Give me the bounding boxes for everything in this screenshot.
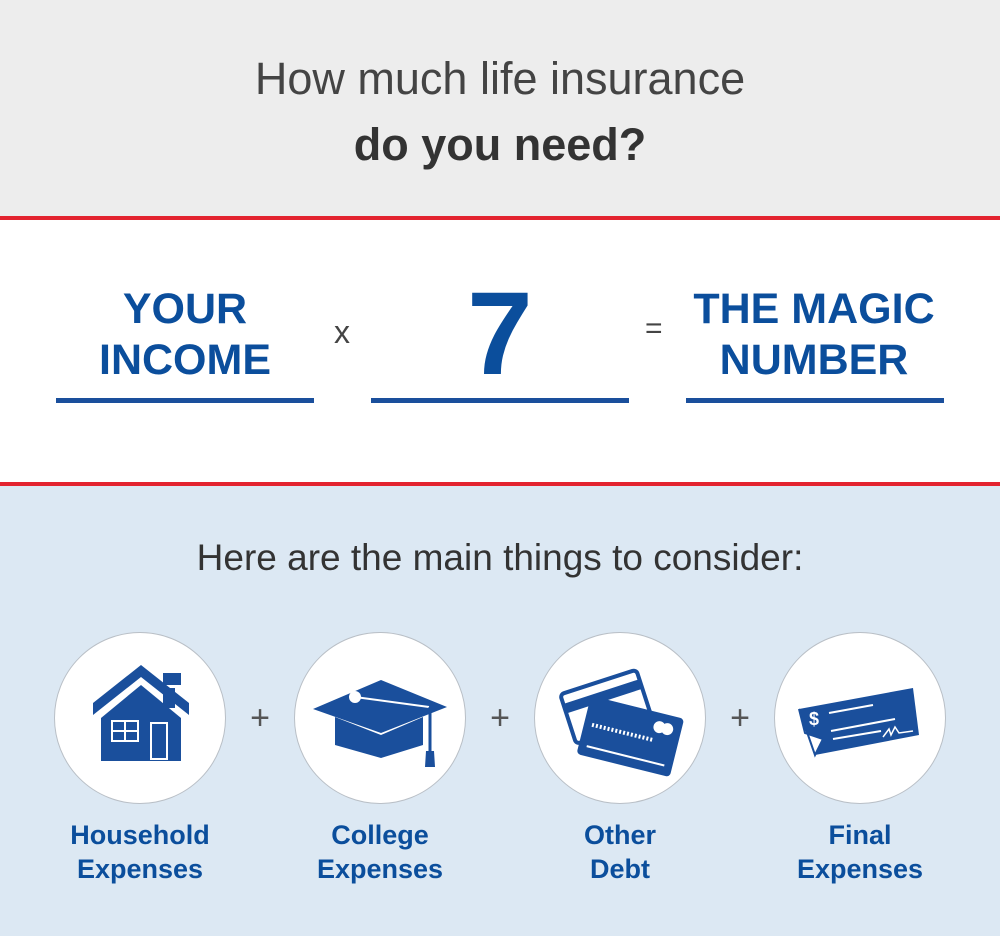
equals sign: = xyxy=(645,312,663,345)
the magic number: THE MAGIC xyxy=(693,285,935,333)
label debt: Other xyxy=(584,820,656,850)
your income: INCOME xyxy=(99,336,271,384)
the magic number: NUMBER xyxy=(720,336,908,384)
number 7: 7 xyxy=(467,268,533,400)
circle: check xyxy=(774,632,946,804)
your income: YOUR xyxy=(123,285,247,333)
circle: house xyxy=(54,632,226,804)
label household: Household xyxy=(70,820,210,850)
label college: Expenses xyxy=(317,854,443,884)
plus 3: + xyxy=(730,699,750,737)
subheading: Here are the main things to consider: xyxy=(197,537,803,578)
label household xyxy=(70,820,210,884)
circle: cap xyxy=(294,632,466,804)
your income xyxy=(99,285,271,384)
header band xyxy=(0,0,1000,216)
plus 2: + xyxy=(490,699,510,737)
label final: Final xyxy=(828,820,892,850)
circle: check: $ xyxy=(809,709,819,729)
title xyxy=(255,53,745,170)
circle: cards xyxy=(534,632,706,804)
title: do you need? xyxy=(354,119,646,170)
multiply sign: x xyxy=(334,314,350,350)
plus 1: + xyxy=(250,699,270,737)
label final xyxy=(797,820,923,884)
the magic number xyxy=(693,285,935,384)
label college xyxy=(317,820,443,884)
equation panel xyxy=(0,216,1000,486)
label debt xyxy=(584,820,656,884)
label household: Expenses xyxy=(77,854,203,884)
label debt: Debt xyxy=(590,854,650,884)
label final: Expenses xyxy=(797,854,923,884)
title: How much life insurance xyxy=(255,53,745,104)
label college: College xyxy=(331,820,429,850)
